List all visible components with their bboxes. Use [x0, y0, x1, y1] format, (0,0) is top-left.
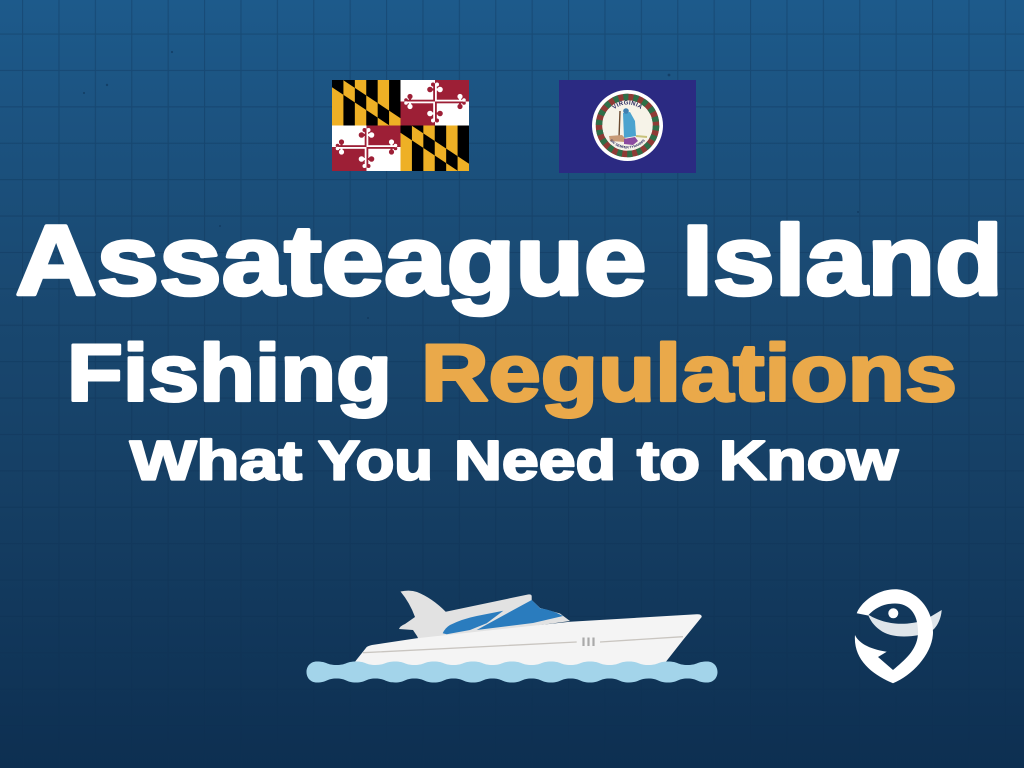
icon: Maryland flag [332, 80, 469, 171]
tagline: You [318, 429, 433, 492]
boat vents [584, 638, 594, 646]
tagline: to [637, 429, 700, 492]
boat fin and cabin [399, 591, 570, 642]
subtitle [67, 328, 957, 418]
icon: Virginia flag: SIC SEMPER TYRANNIS [610, 139, 645, 148]
boat hull [350, 614, 702, 668]
tagline: Know [719, 429, 899, 492]
subtitle: Regulations [421, 328, 957, 418]
boat window rear [443, 611, 503, 634]
icon: boat [306, 591, 718, 682]
tagline: Need [454, 429, 616, 492]
logo band [868, 610, 942, 636]
water [306, 662, 718, 682]
icon: fish logo [855, 589, 942, 683]
icon: Virginia flag: VIRGINIA [612, 100, 642, 110]
icon: Virginia flag [559, 80, 696, 173]
tagline [130, 429, 899, 492]
title: Assateague [16, 204, 646, 316]
boat window front [477, 600, 563, 630]
subtitle: Fishing [67, 328, 392, 418]
tagline: What [130, 429, 302, 492]
title [16, 204, 1003, 316]
boat stripe [363, 637, 683, 653]
title: Island [682, 204, 1003, 316]
logo body [855, 589, 933, 683]
logo eye [888, 608, 898, 618]
